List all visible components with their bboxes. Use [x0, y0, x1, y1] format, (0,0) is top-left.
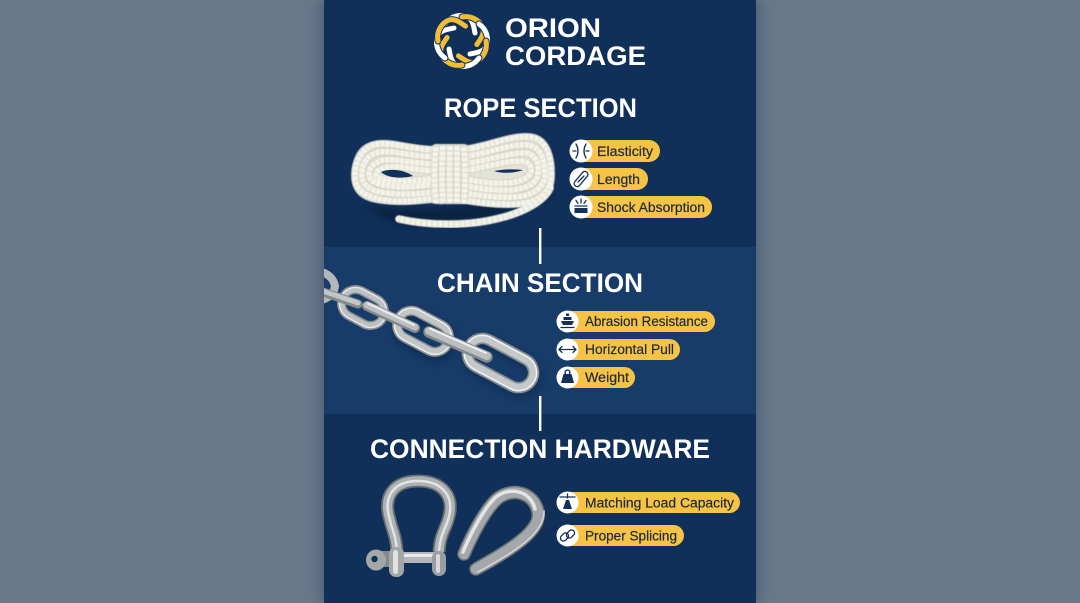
icon: length link	[573, 170, 589, 188]
badge: abrasion resistance	[556, 310, 715, 332]
chain link 3	[392, 306, 454, 357]
badge: elasticity	[570, 140, 660, 162]
panel: chain section	[320, 247, 756, 414]
badge: horizontal pull: Horizontal Pull	[585, 342, 674, 357]
badge: proper splicing: Proper Splicing	[585, 528, 677, 544]
logo	[432, 11, 646, 71]
chain link 4	[462, 332, 540, 394]
badge: matching load capacity: Matching Load Capacity	[585, 496, 734, 510]
badge: shock absorption: Shock Absorption	[597, 200, 705, 215]
chain end link	[322, 272, 335, 300]
brand name	[505, 13, 646, 71]
shackle pin head	[366, 550, 386, 570]
chain bar 1	[320, 290, 358, 304]
badge: horizontal pull	[556, 338, 680, 360]
heading: rope section: ROPE SECTION	[444, 93, 637, 123]
icon: ship	[561, 314, 574, 328]
panel: connection hardware	[324, 414, 756, 603]
illustration: coiled rope	[352, 134, 554, 226]
badge: matching load capacity	[556, 492, 740, 514]
rope openings	[381, 170, 413, 178]
icon: weight	[561, 370, 574, 383]
feature list: rope	[570, 140, 712, 218]
icon: load capacity	[560, 494, 575, 509]
brand name: CORDAGE	[505, 41, 646, 71]
feature list: chain	[556, 310, 715, 388]
illustration: bow shackle	[366, 481, 450, 577]
badge: abrasion resistance: Abrasion Resistance	[585, 314, 708, 329]
badge: weight: Weight	[585, 370, 629, 385]
brand name: ORION	[505, 13, 601, 43]
icon: splicing link	[559, 529, 576, 542]
logo mark	[432, 11, 492, 71]
badge: elasticity: Elasticity	[597, 144, 653, 159]
badge: length: Length	[597, 172, 640, 187]
feature list: hardware	[556, 492, 740, 546]
badge: shock absorption	[570, 196, 712, 218]
heading: connection hardware: CONNECTION HARDWARE	[370, 434, 710, 464]
badge: weight	[556, 366, 635, 388]
chain link 2	[336, 285, 389, 330]
rope tail	[399, 188, 550, 224]
shackle pin	[381, 551, 436, 567]
panel: rope section	[324, 0, 756, 247]
illustration: steel chain	[320, 272, 543, 398]
icon: double arrow	[559, 346, 576, 352]
connector: rope to chain	[539, 228, 541, 264]
shackle bow	[388, 481, 450, 552]
rope coils	[355, 137, 551, 204]
shackle ears	[389, 547, 446, 577]
illustration: thimble	[462, 491, 544, 572]
badge: length	[570, 168, 648, 190]
badge: proper splicing	[556, 524, 684, 546]
connector: chain to hardware	[539, 396, 541, 431]
icon: elasticity arrows	[573, 144, 589, 158]
chain bar 2	[367, 304, 415, 328]
chain bar 3	[429, 328, 487, 357]
icon: shock absorption	[574, 199, 588, 213]
heading: chain section: CHAIN SECTION	[437, 268, 643, 298]
rope binding	[431, 144, 469, 204]
